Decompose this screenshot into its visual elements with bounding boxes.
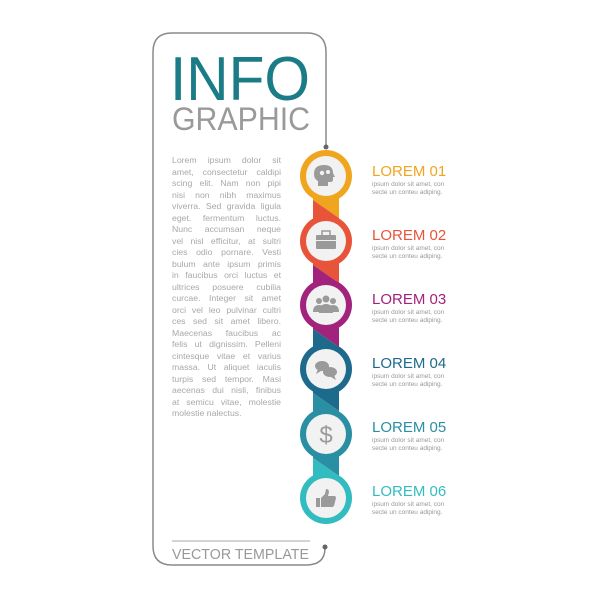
label 01: LOREM 01 [372,163,446,180]
ribbon connectors [313,176,339,498]
body text: Maecenas faucibus ac [172,328,281,338]
label 02: LOREM 02 [372,227,446,244]
label 05 [372,419,446,452]
footer: vector template: VECTOR TEMPLATE [172,547,309,563]
body text: amet, consectetur caldipi [172,166,281,176]
label 03: ipsum dolor sit amet, con [372,309,445,316]
label 02: ipsum dolor sit amet, con [372,245,445,252]
body text: molestie nalectus. [172,408,242,418]
body text: orci vel leo pulvinar cultri [172,304,281,314]
circle 02 [300,215,352,267]
icon: briefcase [316,231,336,249]
body text: Lorem ipsum dolor sit [172,155,281,165]
icon: chat bubbles [315,361,337,380]
body text: massa. Ut aliquet iaculis [172,362,281,372]
icon: people [313,296,339,313]
body text: aecenas dui nisli, finibus [172,385,281,395]
icon: head gears [314,165,335,186]
label 06: LOREM 06 [372,483,446,500]
body text: vel nisl efficitur, at sultri [172,236,281,246]
label 03 [372,291,446,324]
body text: turpis sed tempor. Masi [172,374,281,384]
label 03: secte un conteu adiping. [372,317,443,324]
label 01 [372,163,446,196]
label 01: ipsum dolor sit amet, con [372,181,445,188]
body text: cies odio pornare. Vesti [172,247,281,257]
frame [153,33,328,565]
body text: ces sed sit amet libero. [172,316,281,326]
label 05: secte un conteu adiping. [372,445,443,452]
label 04: secte un conteu adiping. [372,381,443,388]
label 04: ipsum dolor sit amet, con [372,373,445,380]
label 05: LOREM 05 [372,419,446,436]
body text: ultrices posuere cubilia [172,282,281,292]
body text: eget. fermentum luctus. [172,212,281,222]
label 06 [372,483,446,516]
body text: cintesque vitae et varius [172,350,281,360]
body text: nisi non nibh maximus [172,190,281,200]
body text [172,155,281,418]
body text: in faucibus orci luctus et [172,270,281,280]
title: INFO [170,45,310,114]
label 06: secte un conteu adiping. [372,509,443,516]
body text: scing elit. Nam non pipi [172,178,281,188]
body text: curcae. Integer sit amet [172,293,281,303]
circle 01 [300,150,352,202]
label 03: LOREM 03 [372,291,446,308]
label 04 [372,355,446,388]
label 06: ipsum dolor sit amet, con [372,501,445,508]
icon: thumbs up [316,489,336,507]
label 02: secte un conteu adiping. [372,253,443,260]
body text: felis ut dignissim. Pelleni [172,339,281,349]
body text: viverra. Sed gravida ligula [172,201,281,211]
title: GRAPHIC [172,101,310,137]
icon: dollar: $ [319,422,333,449]
label 05: ipsum dolor sit amet, con [372,437,445,444]
circle 03 [300,279,352,331]
label 02 [372,227,446,260]
body text: Nunc accumsan neque [172,224,281,234]
label 04: LOREM 04 [372,355,446,372]
label 01: secte un conteu adiping. [372,189,443,196]
circle 05 [300,408,352,460]
circle 04 [300,343,352,395]
body text: at semicu vitae, molestie [172,396,281,406]
circle 06 [300,472,352,524]
body text: bulum ante ipsum primis [172,258,281,268]
